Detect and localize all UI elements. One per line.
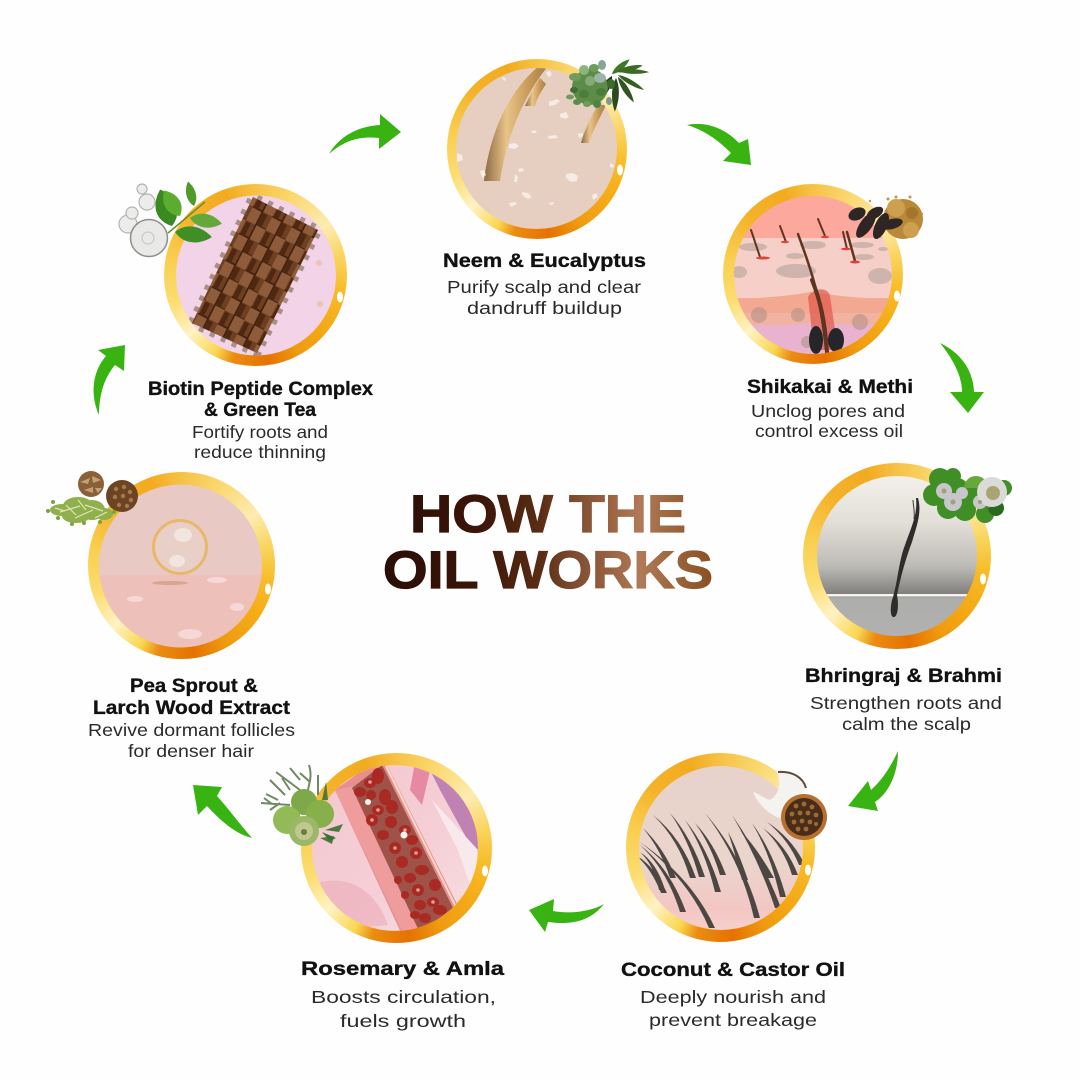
blood vessel illustration bbox=[312, 765, 478, 931]
panel: Bhringraj & Brahmi bbox=[803, 463, 1012, 649]
gold ring bbox=[164, 184, 347, 366]
text: Bhringraj & Brahmi bbox=[805, 665, 1002, 734]
text: Shikakai & Methi bbox=[747, 376, 913, 441]
text: Rosemary & Amla: Boosts circulation, bbox=[311, 987, 496, 1007]
arrow: to Bhringraj & Brahmi bbox=[940, 343, 984, 413]
white ring highlight bbox=[805, 864, 811, 876]
text: Neem & Eucalyptus: Purify scalp and clear bbox=[447, 277, 641, 297]
arrow: to Neem & Eucalyptus bbox=[329, 114, 401, 154]
text: Coconut & Castor Oil: Coconut & Castor Oil bbox=[621, 959, 845, 981]
text: Biotin Peptide Complex & Green Tea: Fortify roots and bbox=[192, 422, 328, 442]
scalp illustration with flakes bbox=[456, 68, 617, 229]
icon: larch cones and pea sprouts bbox=[46, 471, 138, 526]
icon: rosemary sprigs and amla bbox=[261, 765, 343, 846]
text: Neem & Eucalyptus bbox=[443, 250, 646, 318]
hair shaft with scales illustration bbox=[176, 196, 336, 356]
icon: neem and eucalyptus sprig bbox=[566, 57, 649, 112]
icon: bhringraj and brahmi flowers bbox=[923, 468, 1012, 523]
panel: Neem & Eucalyptus bbox=[447, 57, 649, 239]
text: Pea Sprout & Larch Wood Extract: for denser hair bbox=[128, 741, 254, 761]
white ring highlight bbox=[894, 290, 900, 302]
text: Biotin Peptide Complex & Green Tea bbox=[148, 378, 373, 462]
text: Coconut & Castor Oil bbox=[621, 959, 845, 1030]
hair strand illustration bbox=[817, 476, 977, 636]
gold ring bbox=[803, 463, 991, 649]
arrow: to Biotin Peptide Complex bbox=[94, 345, 125, 415]
panel: Shikakai & Methi bbox=[723, 184, 923, 364]
text: Rosemary & Amla: Rosemary & Amla bbox=[301, 958, 504, 980]
text: Rosemary & Amla: fuels growth bbox=[340, 1011, 466, 1031]
title: HOW THE bbox=[410, 485, 686, 544]
arrow: to Rosemary & Amla bbox=[529, 899, 604, 932]
white ring highlight bbox=[265, 584, 271, 594]
panel: Coconut & Castor Oil bbox=[626, 753, 827, 942]
gold ring bbox=[447, 59, 627, 239]
text: Pea Sprout & Larch Wood Extract: Revive dormant follicles bbox=[88, 720, 295, 740]
text: Coconut & Castor Oil: Deeply nourish and bbox=[640, 987, 826, 1007]
oil drop on scalp illustration bbox=[99, 484, 262, 648]
white ring highlight bbox=[617, 164, 623, 176]
hair growth illustration bbox=[639, 766, 803, 930]
title bbox=[383, 485, 713, 600]
text: Shikakai & Methi: control excess oil bbox=[755, 421, 903, 441]
text: Neem & Eucalyptus: dandruff buildup bbox=[467, 298, 622, 318]
text: Pea Sprout & Larch Wood Extract: Pea Sprout & bbox=[130, 675, 258, 697]
scalp cross-section illustration bbox=[734, 196, 892, 354]
panel: Rosemary & Amla bbox=[261, 753, 492, 943]
text: Pea Sprout & Larch Wood Extract bbox=[88, 675, 295, 761]
arrow: to Coconut & Castor Oil bbox=[848, 751, 898, 811]
text: Neem & Eucalyptus: Neem & Eucalyptus bbox=[443, 250, 646, 272]
text: Shikakai & Methi: Unclog pores and bbox=[751, 401, 905, 421]
text: Bhringraj & Brahmi: Bhringraj & Brahmi bbox=[805, 665, 1002, 687]
panel: Pea Sprout & Larch Wood Extract bbox=[46, 471, 275, 659]
gold ring bbox=[626, 753, 815, 942]
white ring highlight bbox=[337, 292, 343, 302]
white ring highlight bbox=[482, 866, 488, 876]
text: Bhringraj & Brahmi: Strengthen roots and bbox=[810, 693, 1002, 713]
icon: shikakai pods and methi seeds bbox=[846, 196, 923, 241]
text: Rosemary & Amla bbox=[301, 958, 504, 1031]
text: Pea Sprout & Larch Wood Extract: Larch Wood Extract bbox=[93, 697, 291, 719]
text: Biotin Peptide Complex & Green Tea: reduce thinning bbox=[194, 442, 326, 462]
text: Shikakai & Methi: Shikakai & Methi bbox=[747, 376, 913, 398]
text: Bhringraj & Brahmi: calm the scalp bbox=[842, 714, 971, 734]
gold ring bbox=[88, 472, 275, 659]
title: OIL WORKS bbox=[383, 541, 713, 600]
text: Biotin Peptide Complex & Green Tea: Biotin Peptide Complex bbox=[148, 378, 373, 400]
arrow: to Shikakai & Methi bbox=[687, 124, 751, 165]
icon: coconut and castor seeds bowl bbox=[753, 772, 827, 840]
arrow: to Pea Sprout & Larch Wood bbox=[193, 785, 252, 838]
gold ring bbox=[723, 184, 903, 364]
oil bubble bbox=[154, 520, 206, 574]
panel: Biotin Peptide Complex & Green Tea bbox=[119, 180, 347, 366]
white ring highlight bbox=[980, 574, 986, 584]
icon: serum bubbles and green tea leaves bbox=[119, 180, 223, 256]
gold ring bbox=[301, 753, 492, 943]
text: Coconut & Castor Oil: prevent breakage bbox=[649, 1010, 817, 1030]
text: Biotin Peptide Complex & Green Tea: & Green Tea bbox=[204, 399, 316, 421]
